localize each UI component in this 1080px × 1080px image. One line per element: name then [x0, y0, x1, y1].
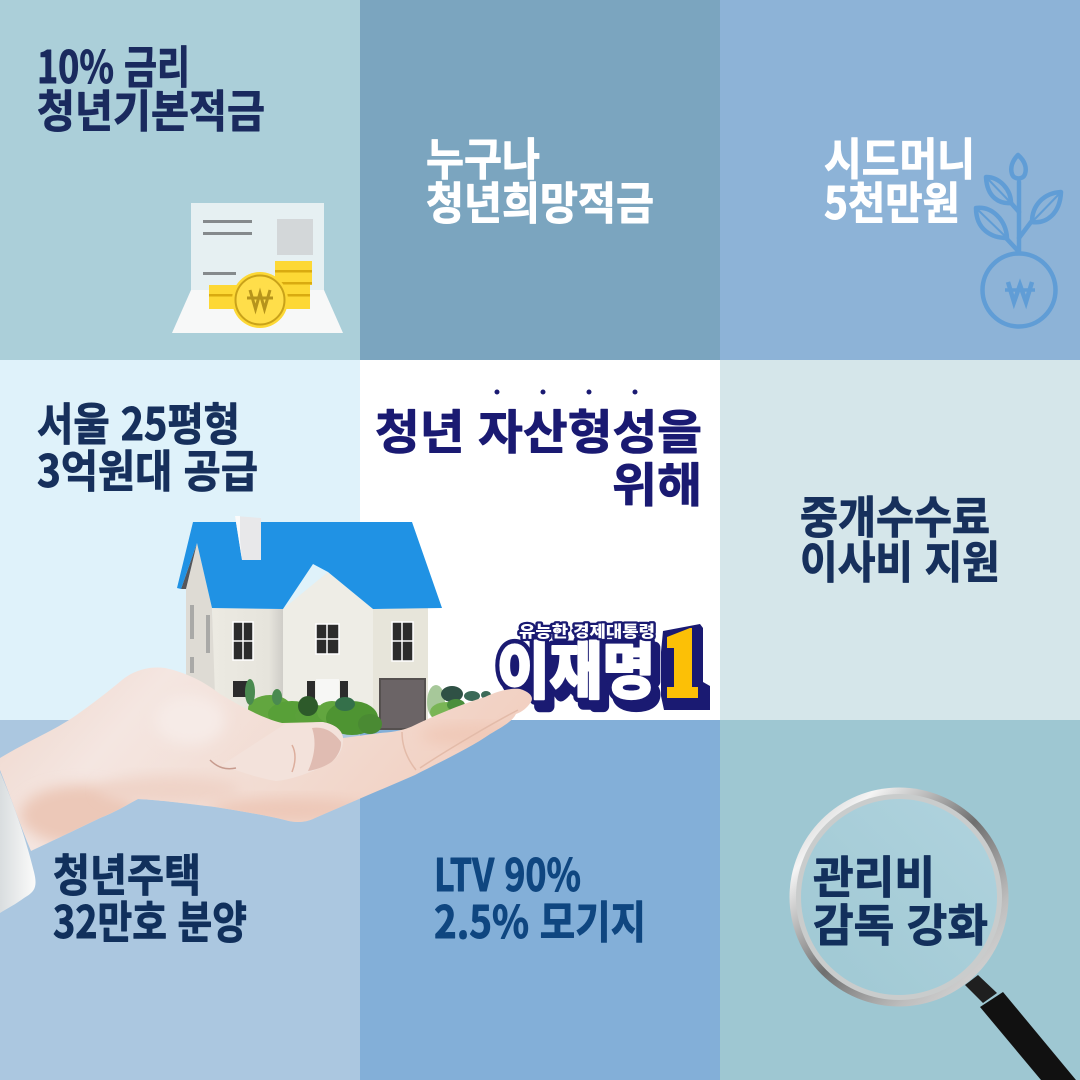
- text: management fee oversight: 감독 강화: [813, 889, 988, 954]
- text: management fee oversight: 관리비: [813, 841, 935, 906]
- heading: central title: [375, 390, 702, 516]
- heading: central title: 청년 자산형성을: [375, 394, 702, 463]
- text: LTV 90% mortgage: [434, 839, 646, 951]
- heading: central title: 위해: [612, 447, 702, 516]
- illustration: shirt cuff: [0, 772, 36, 913]
- text: seed money 50 million won: 시드머니: [824, 123, 975, 188]
- text: brokerage and moving support: [800, 481, 1000, 591]
- text: LTV 90% mortgage: 2.5% 모기지: [434, 886, 646, 951]
- logo: candidate name mark: 이재명: [497, 621, 655, 711]
- text: management fee oversight: [813, 841, 988, 954]
- text: 10% interest youth savings: 10% 금리: [37, 31, 190, 96]
- panel: LTV mortgage background: [360, 720, 720, 1080]
- text: brokerage and moving support: 이사비 지원: [800, 526, 1000, 591]
- text: hope savings for everyone: 청년희망적금: [426, 167, 654, 232]
- logo: candidate name mark: 유능한 경제대통령: [519, 618, 655, 642]
- text: hope savings for everyone: 누구나: [426, 123, 540, 188]
- panel: seed money background: [720, 0, 1080, 360]
- illustration: shrubs and trees: [245, 679, 491, 735]
- icon: bankbook with won coins: [172, 203, 343, 333]
- text: brokerage and moving support: 중개수수료: [800, 481, 990, 546]
- text: Seoul 25-pyeong supply: 서울 25평형: [37, 388, 240, 453]
- text: hope savings for everyone: [426, 123, 654, 232]
- text: 10% interest youth savings: [37, 31, 265, 140]
- panel: central title background: [360, 360, 720, 720]
- panel: moving support background: [720, 360, 1080, 720]
- illustration: open hand: [0, 668, 532, 851]
- text: LTV 90% mortgage: LTV 90%: [434, 839, 581, 904]
- text: 10% interest youth savings: 청년기본적금: [37, 75, 265, 140]
- logo: candidate name mark: 이재명: [497, 621, 655, 711]
- text: seed money 50 million won: 5천만원: [824, 167, 960, 232]
- panel: 10% interest background: [0, 0, 360, 360]
- text: seed money 50 million won: [824, 123, 975, 232]
- text: Seoul 25-pyeong supply: [37, 388, 258, 500]
- text: youth housing 320,000 units: [53, 839, 247, 951]
- logo: candidate name mark: 이재명: [502, 628, 660, 718]
- illustration: house: [177, 516, 491, 735]
- panel: management fee background: [720, 720, 1080, 1080]
- panel: youth housing background: [0, 720, 360, 1080]
- text: Seoul 25-pyeong supply: 3억원대 공급: [37, 435, 258, 500]
- panel: hope savings background: [360, 0, 720, 360]
- text: youth housing 320,000 units: 32만호 분양: [53, 886, 247, 951]
- text: youth housing 320,000 units: 청년주택: [53, 839, 201, 904]
- icon: money plant: [976, 155, 1061, 326]
- illustration: magnifying glass: [790, 788, 1076, 1080]
- panel: Seoul supply background: [0, 360, 360, 720]
